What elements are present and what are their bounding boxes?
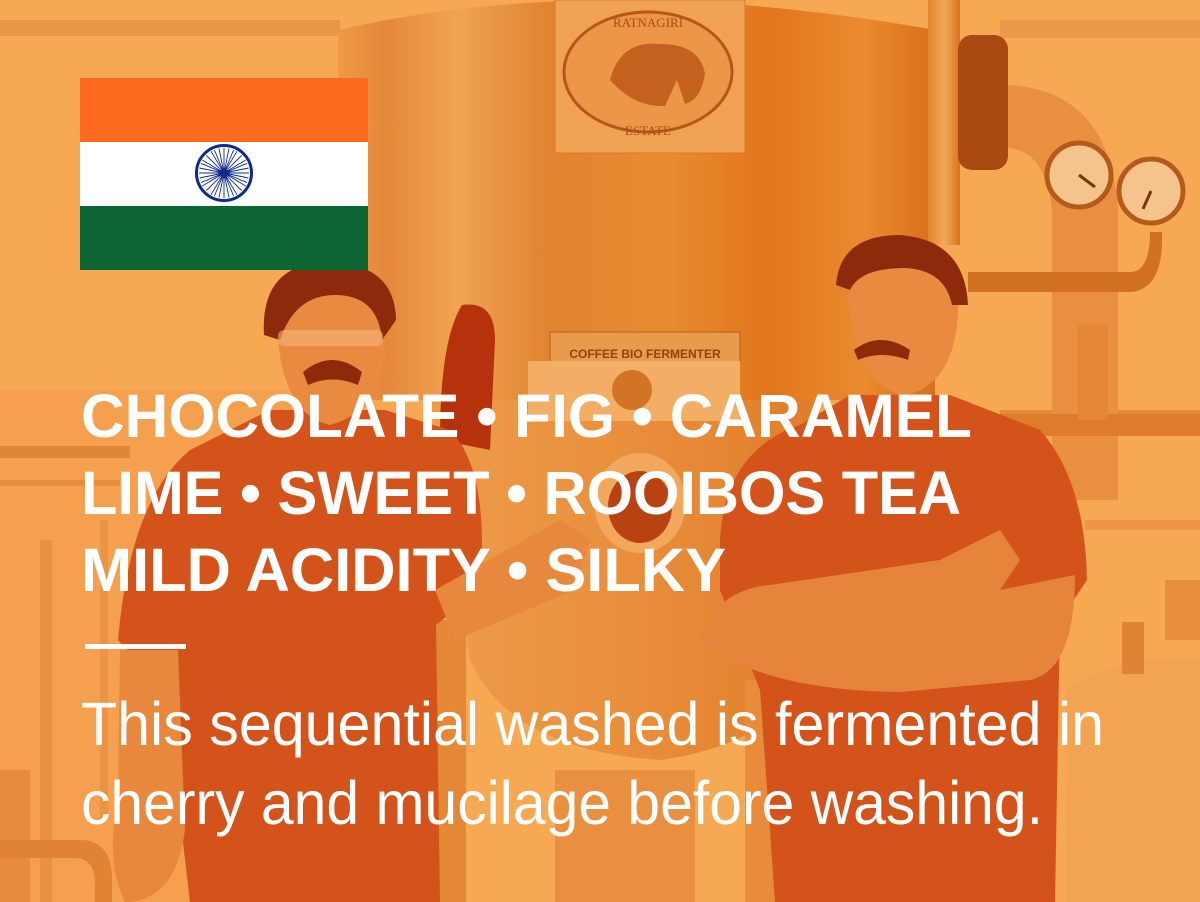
heading: flavour notes (81, 382, 972, 604)
fermentation tank (338, 0, 935, 902)
tank porthole (594, 453, 686, 553)
pipes and gauges (928, 0, 1200, 500)
heading: flavour notes: MILD ACIDITY • SILKY (81, 536, 726, 604)
heading: flavour notes: LIME • SWEET • ROOIBOS TEA (81, 459, 961, 527)
divider rule (85, 644, 186, 649)
tank nameplate (528, 332, 740, 421)
person: right man (700, 235, 1087, 902)
icon: Ashoka chakra (196, 146, 252, 200)
description text: This sequential washed is fermented in (81, 690, 1104, 758)
tank label: Ratnagiri Estate plate: ESTATE (625, 123, 671, 138)
person: left man (113, 262, 590, 902)
pressure gauge left (1047, 143, 1111, 207)
description text: cherry and mucilage before washing. (81, 769, 1043, 837)
pressure gauge right (1119, 159, 1183, 223)
tank nameplate: COFFEE BIO FERMENTER (569, 347, 721, 361)
heading: flavour notes: CHOCOLATE • FIG • CARAMEL (81, 382, 972, 450)
description text (81, 690, 1104, 837)
tank label: Ratnagiri Estate plate (555, 0, 745, 153)
flag: India (80, 78, 368, 270)
tank label: Ratnagiri Estate plate: RATNAGIRI (613, 15, 683, 30)
